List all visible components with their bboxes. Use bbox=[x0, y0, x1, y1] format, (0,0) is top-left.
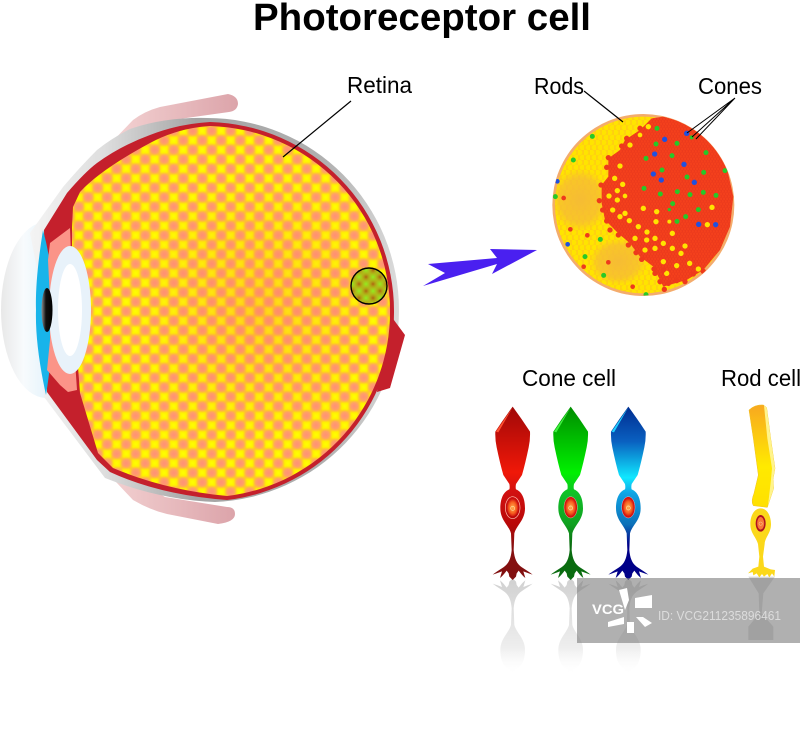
arrow bbox=[423, 249, 537, 286]
rods label bbox=[534, 73, 623, 122]
rod nucleus bbox=[756, 515, 766, 532]
watermark panel: ID: VCG211235896461 bbox=[658, 609, 781, 623]
reflections bbox=[493, 577, 775, 752]
lower eye muscle bbox=[100, 465, 235, 524]
retina bbox=[72, 126, 390, 496]
blue cone cell bbox=[608, 407, 648, 580]
rod highlight bbox=[764, 406, 775, 505]
pupil bbox=[42, 288, 52, 332]
red cells at the boundary bbox=[561, 126, 706, 292]
cones label: Cones bbox=[698, 73, 762, 99]
optic nerve bbox=[377, 312, 405, 392]
rod outer segment bbox=[749, 405, 775, 507]
rod soma and synapse bbox=[748, 508, 775, 577]
green cone cell bbox=[551, 407, 591, 580]
watermark panel: VCG bbox=[592, 601, 624, 617]
rod field bbox=[555, 117, 732, 293]
retina label bbox=[283, 72, 412, 157]
cornea bbox=[1, 222, 91, 398]
rod cell bbox=[748, 405, 775, 577]
ciliary body bbox=[47, 228, 77, 392]
blue cones bbox=[555, 131, 718, 247]
eye cross-section diagram bbox=[1, 94, 405, 524]
rods label: Rods bbox=[534, 73, 584, 99]
lens bbox=[49, 246, 91, 374]
yellow cells in the red field bbox=[606, 124, 715, 276]
sclera bbox=[30, 118, 399, 502]
iris bbox=[36, 230, 52, 395]
upper eye muscle bbox=[108, 94, 238, 146]
darker rod patches bbox=[552, 168, 647, 285]
photoreceptor cells bbox=[493, 405, 775, 752]
cone-rich field bbox=[602, 117, 733, 287]
retina close-up disc bbox=[552, 114, 734, 297]
watermark logo bbox=[608, 588, 652, 633]
lens core bbox=[58, 264, 82, 356]
retina warm patch bbox=[120, 180, 370, 440]
red cone cell bbox=[493, 407, 533, 580]
choroid red layer bbox=[44, 122, 394, 500]
retina label: Retina bbox=[347, 72, 412, 98]
cones label bbox=[687, 73, 762, 139]
green cones bbox=[553, 126, 727, 297]
cone cell heading: Cone cell bbox=[522, 365, 616, 391]
retina sample circle bbox=[351, 268, 387, 304]
watermark panel bbox=[577, 578, 800, 643]
